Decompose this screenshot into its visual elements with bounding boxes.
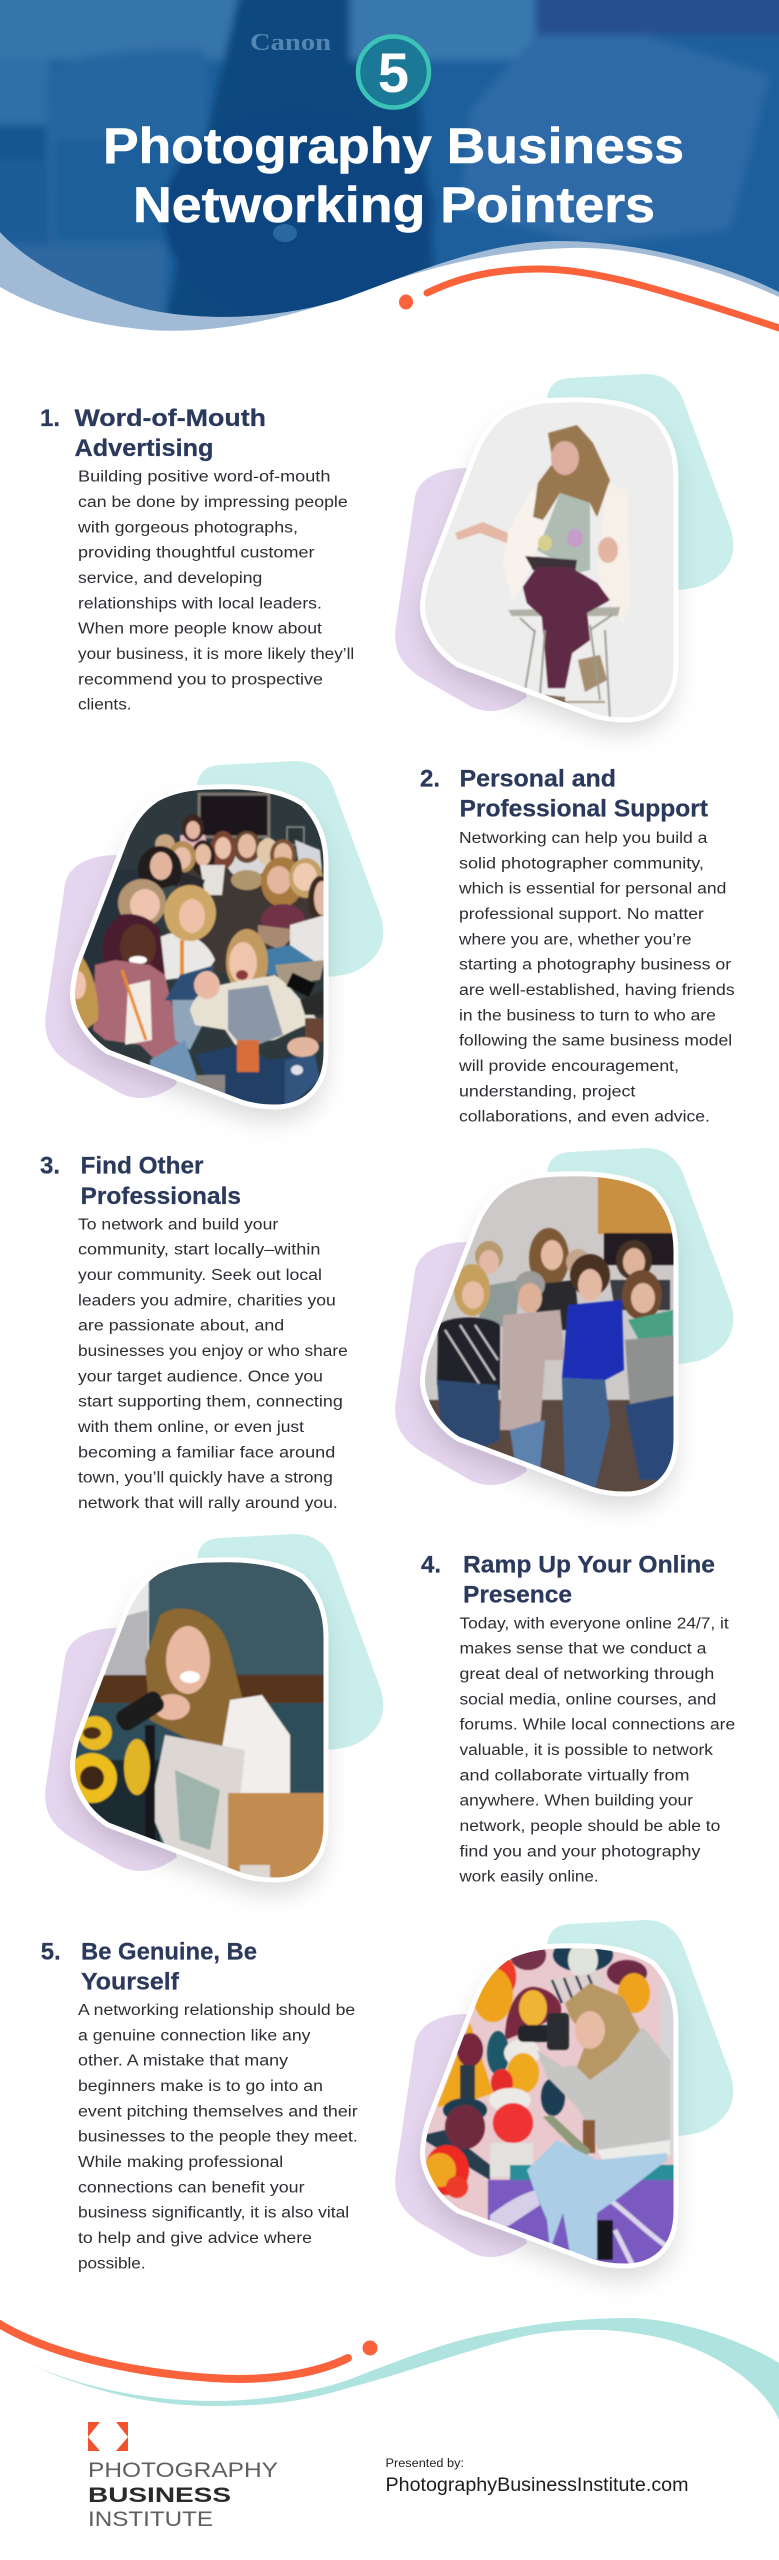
presented by: Presented by: [386, 2458, 464, 2470]
photo 1 white frame [423, 400, 676, 720]
body text 4: great deal of networking through [460, 1666, 714, 1683]
panel: photo 4, woman at microphone [45, 1534, 383, 1890]
footer orange dot [362, 2340, 378, 2356]
panel: photo 2, group selfie [45, 761, 383, 1120]
purple blob 3 [395, 1242, 527, 1485]
logo wordmark: PHOTOGRAPHY [88, 2459, 278, 2482]
teal blob 2 [197, 761, 383, 977]
body text 2 [458, 830, 735, 1126]
body text 1: recommend you to prospective [78, 671, 323, 688]
heading 2: 2. [420, 766, 440, 793]
heading 4: Ramp Up Your Online [463, 1552, 715, 1579]
body text 5: a genuine connection like any [78, 2027, 311, 2044]
panel: item 3 text [40, 1152, 348, 1512]
heading 5: Be Genuine, Be [81, 1938, 257, 1965]
body text 1: When more people know about [78, 621, 323, 638]
photo 2 content [75, 789, 324, 1104]
body text 4 [458, 1615, 735, 1886]
body text 4: network, people should be able to [460, 1818, 720, 1835]
heading 5: Yourself [81, 1968, 180, 1995]
photo 4 white frame [73, 1560, 326, 1880]
body text 2: which is essential for personal and [458, 881, 726, 898]
heading 1: Word-of-Mouth [74, 405, 266, 432]
body text 5: connections can benefit your [78, 2179, 304, 2196]
logo wordmark: BUSINESS [88, 2484, 231, 2507]
panel: photo 1, woman on stool [395, 374, 733, 730]
photo 4 content [75, 1562, 324, 1878]
body text 3: network that will rally around you. [78, 1495, 338, 1512]
body text 3: town, you’ll quickly have a strong [78, 1470, 333, 1487]
panel: item 4 text [421, 1552, 735, 1886]
body text 5 [78, 2002, 358, 2272]
heading 3: Professionals [80, 1183, 241, 1210]
purple blob 4 [45, 1628, 177, 1871]
header photo: blurred camera in blue [0, 0, 779, 340]
heading 4 [421, 1552, 715, 1609]
photo card backing 5 [423, 1946, 676, 2266]
photo card backing 1 [423, 400, 676, 720]
heading 5: 5. [41, 1938, 61, 1965]
panel: item 5 text [41, 1938, 358, 2272]
photo 3 white frame [423, 1174, 676, 1494]
heading 2 [420, 766, 708, 823]
footer teal wave [10, 2318, 779, 2420]
purple blob 2 [45, 855, 177, 1098]
teal blob 4 [197, 1534, 383, 1750]
body text 1: can be done by impressing people [78, 494, 348, 511]
photo card backing 2 [73, 787, 326, 1107]
header wave: light blue band [0, 0, 779, 331]
panel: photo 5, photographer at mural [395, 1920, 733, 2280]
body text 1: clients. [78, 697, 132, 714]
heading 1: Advertising [74, 435, 214, 462]
body text 5: beginners make is to go into an [78, 2078, 323, 2095]
heading 2: Professional Support [460, 796, 708, 823]
footer panel [0, 2318, 779, 2531]
heading 1 [40, 405, 266, 462]
body text 4: Today, with everyone online 24/7, it [460, 1615, 729, 1632]
body text 1 [77, 469, 354, 714]
body text 5: event pitching themselves and their [78, 2103, 358, 2120]
logo wordmark: INSTITUTE [88, 2508, 213, 2531]
body text 5: possible. [78, 2255, 146, 2272]
heading 2: Personal and [460, 766, 616, 793]
body text 1: service, and developing [78, 570, 262, 587]
number badge: 5 [378, 41, 409, 104]
photo 5 content [425, 1948, 674, 2264]
header orange dot [399, 294, 413, 310]
footer orange swoosh [0, 2322, 348, 2379]
photo card backing 4 [73, 1560, 326, 1880]
purple blob 1 [395, 468, 527, 711]
body text 1: providing thoughtful customer [78, 545, 314, 562]
body text 2: will provide encouragement, [458, 1058, 679, 1075]
body text 2: in the business to turn to who are [459, 1007, 716, 1024]
body text 5: other. A mistake that many [78, 2053, 288, 2070]
body text 4: makes sense that we conduct a [460, 1641, 707, 1658]
body text 4: find you and your photography [460, 1843, 701, 1860]
body text 2: solid photographer community, [459, 855, 704, 872]
panel: item 1 text [40, 405, 354, 714]
heading 4: 4. [421, 1552, 441, 1579]
body text 3: start supporting them, connecting [78, 1394, 343, 1411]
photo 5 white frame [423, 1946, 676, 2266]
logo [88, 2422, 278, 2531]
body text 4: social media, online courses, and [460, 1691, 716, 1708]
body text 5: A networking relationship should be [78, 2002, 355, 2019]
body text 1: Building positive word-of-mouth [78, 469, 330, 486]
photo card backing 3 [423, 1174, 676, 1494]
photo 2 white frame [73, 787, 326, 1107]
body text 3: becoming a familiar face around [78, 1444, 335, 1461]
body text 5: business significantly, it is also vital [78, 2205, 349, 2222]
body text 3: your community. Seek out local [78, 1267, 322, 1284]
purple blob 5 [395, 2014, 527, 2257]
body text 2: collaborations, and even advice. [459, 1109, 710, 1126]
heading 3 [40, 1152, 241, 1210]
body text 4: forums. While local connections are [460, 1717, 735, 1734]
body text 2: starting a photography business or [459, 957, 731, 974]
body text 3: businesses you enjoy or who share [78, 1343, 348, 1360]
body text 5: businesses to the people they meet. [78, 2129, 358, 2146]
header orange swoosh [427, 269, 779, 328]
heading 1: 1. [40, 405, 60, 432]
logo wordmark [88, 2459, 278, 2531]
logo mark [88, 2422, 128, 2451]
photo 1 content [425, 402, 674, 718]
heading 3: 3. [40, 1152, 60, 1179]
body text 1: your business, it is more likely they’ll [78, 646, 354, 663]
body text 2: where you are, whether you’re [458, 931, 692, 948]
panel: item 2 text [420, 766, 735, 1126]
panel: photo 3, group of women [395, 1148, 733, 1500]
body text 2: following the same business model [459, 1033, 732, 1050]
teal blob 1 [547, 374, 733, 590]
camera brand mark: Canon [250, 30, 331, 56]
body text 4: and collaborate virtually from [460, 1767, 690, 1784]
teal blob 3 [547, 1148, 733, 1364]
heading 4: Presence [463, 1582, 572, 1609]
body text 3: community, start locally–within [78, 1242, 320, 1259]
photo 3 content [425, 1176, 674, 1492]
body text 4: valuable, it is possible to network [460, 1742, 713, 1759]
body text 3 [77, 1216, 348, 1512]
presented by: PhotographyBusinessInstitute.com [386, 2475, 688, 2496]
presented by [386, 2458, 688, 2496]
body text 2: understanding, project [459, 1083, 636, 1100]
body text 5: to help and give advice where [78, 2230, 312, 2247]
body text 2: Networking can help you build a [459, 830, 708, 847]
body text 4: anywhere. When building your [460, 1793, 693, 1810]
body text 3: with them online, or even just [77, 1419, 305, 1436]
body text 3: are passionate about, and [78, 1318, 284, 1335]
body text 2: are well-established, having friends [459, 982, 735, 999]
body text 3: your target audience. Once you [78, 1368, 323, 1385]
body text 4: work easily online. [458, 1869, 599, 1886]
title: Networking Pointers [133, 177, 655, 233]
body text 3: To network and build your [78, 1216, 278, 1233]
body text 1: relationships with local leaders. [78, 595, 322, 612]
title [103, 118, 684, 233]
body text 2: professional support. No matter [459, 906, 704, 923]
title: Photography Business [103, 118, 684, 174]
body text 5: While making professional [78, 2154, 283, 2171]
heading 5 [41, 1938, 257, 1995]
body text 3: leaders you admire, charities you [78, 1292, 336, 1309]
teal blob 5 [547, 1920, 733, 2136]
number badge [358, 36, 429, 108]
body text 1: with gorgeous photographs, [77, 519, 298, 536]
header panel [0, 0, 779, 340]
heading 3: Find Other [80, 1152, 204, 1179]
